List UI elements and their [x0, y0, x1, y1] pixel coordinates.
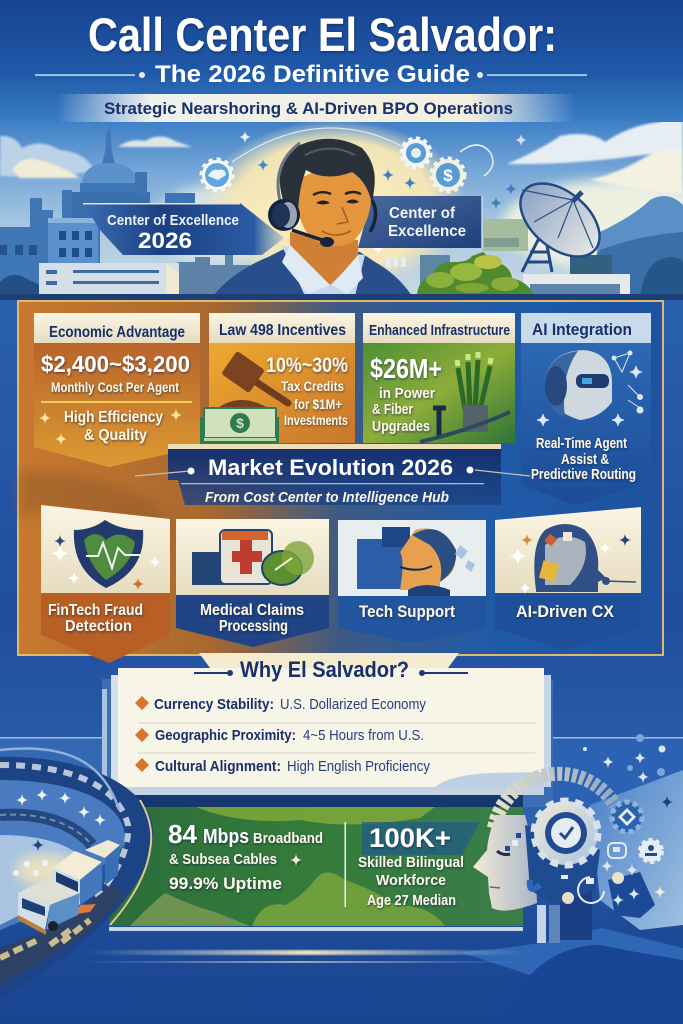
card: Law 498 Incentives: Tax Credits	[281, 378, 344, 394]
stat: workforce: Workforce	[376, 872, 446, 889]
shoulder	[460, 928, 683, 1000]
card: Law 498 Incentives	[200, 313, 355, 445]
icon: medical folder	[192, 530, 314, 585]
card: Economic Advantage	[34, 313, 200, 467]
gear icon: dollar: $	[443, 166, 453, 185]
stat: workforce: 100K+	[369, 823, 451, 853]
inner bridge	[0, 815, 92, 845]
face profile	[473, 815, 537, 911]
banner: Center of Excellence 2026	[83, 203, 284, 255]
side panels behind lower section	[0, 737, 683, 808]
eyes	[316, 200, 359, 204]
bullet: geographic proximity	[135, 727, 424, 744]
outer road shell	[0, 757, 153, 998]
box: Center of Excellence: Excellence	[388, 223, 466, 240]
card: Economic Advantage: High Efficiency	[64, 409, 163, 426]
card: Economic Advantage: Economic Advantage	[49, 324, 185, 341]
train cars	[18, 840, 120, 935]
illustration: AI head and gears	[460, 734, 683, 1024]
city buildings	[0, 190, 250, 297]
card: AI Integration: Real-Time Agent	[536, 436, 627, 452]
small gear: diamond	[612, 802, 642, 832]
card: Medical Claims Processing: Processing	[219, 618, 288, 635]
title: Call Center El Salvador:	[88, 8, 557, 61]
card: Enhanced Infrastructure: Enhanced Infrastructure	[369, 322, 510, 339]
stat: broadband	[168, 819, 323, 893]
satellite dish	[519, 182, 601, 273]
card: AI Integration: Assist &	[561, 452, 609, 468]
headset band	[278, 143, 300, 205]
fan ring	[494, 774, 615, 828]
icon: AI head profile	[509, 524, 636, 594]
swirl arrow	[460, 145, 493, 176]
suit	[213, 246, 412, 296]
glowing base line	[80, 950, 527, 963]
microphone	[292, 230, 322, 240]
stat: workforce: Age 27 Median	[367, 892, 456, 909]
heading tab: Why El Salvador?	[240, 657, 409, 682]
card: Law 498 Incentives: Investments	[284, 412, 348, 428]
card: Enhanced Infrastructure	[363, 313, 515, 443]
icon: support agent at computer	[357, 527, 475, 596]
small gear: person	[640, 840, 662, 862]
headset left cup	[268, 199, 300, 231]
subtitle: The 2026 Definitive Guide	[155, 61, 470, 88]
bullet: currency stability: Currency Stability:	[154, 696, 274, 713]
illustrated skyline scene	[0, 113, 683, 297]
card: FinTech Fraud Detection: FinTech Fraud	[48, 602, 143, 619]
icon: money stack: $	[236, 415, 244, 431]
stat: broadband: & Subsea Cables	[169, 851, 277, 868]
icon: network	[537, 351, 643, 426]
stat: broadband: Broadband	[253, 830, 323, 847]
tagline ribbon: Strategic Nearshoring & AI-Driven BPO Operations	[104, 99, 513, 118]
banner: Center of Excellence 2026: 2026	[138, 228, 192, 253]
card: Enhanced Infrastructure: in Power	[379, 385, 435, 402]
heading tab	[194, 653, 468, 682]
banner: Center of Excellence 2026: Center of Excellence	[107, 212, 239, 229]
satellite base building	[523, 274, 630, 296]
right mountains	[596, 196, 683, 255]
far right trees	[640, 257, 683, 297]
neck	[290, 232, 358, 285]
panel: Why El Salvador?	[118, 653, 544, 787]
card: AI-Driven CX: AI-Driven CX	[516, 602, 615, 621]
bullet: currency stability	[135, 696, 426, 713]
subtitle	[35, 61, 587, 88]
left clouds	[0, 136, 192, 178]
tagline ribbon	[57, 94, 575, 122]
inner sky	[0, 775, 130, 930]
stat: broadband: 99.9% Uptime	[169, 874, 282, 893]
icon: fiber bundle	[420, 352, 510, 442]
card: FinTech Fraud Detection	[41, 505, 170, 663]
chat icon and dots	[561, 843, 626, 904]
icon: gavel	[218, 351, 288, 408]
head circuit pixels	[525, 825, 600, 905]
panel: main strategic panel	[0, 294, 683, 655]
bullet: cultural alignment: Cultural Alignment:	[155, 758, 281, 775]
card: Tech Support	[338, 520, 486, 643]
lower panel backing	[102, 675, 553, 807]
card: Enhanced Infrastructure: $26M+	[370, 353, 442, 384]
box: Center of Excellence	[358, 196, 482, 248]
heading band: Market Evolution 2026: From Cost Center to Intelligence Hub	[205, 489, 449, 506]
stat: broadband: 84	[168, 819, 198, 849]
gear icon: chat	[202, 160, 232, 190]
dark gear silhouette	[608, 872, 655, 918]
card: AI-Driven CX	[495, 507, 641, 650]
card: Enhanced Infrastructure: & Fiber	[372, 401, 413, 418]
icon: shield with heartbeat	[51, 520, 161, 590]
card: AI Integration: AI Integration	[532, 320, 632, 339]
bullet: cultural alignment	[135, 758, 430, 775]
sparkles around agent	[239, 131, 527, 255]
card: AI Integration	[521, 313, 651, 505]
bullet: cultural alignment: High English Proficiency	[287, 758, 430, 775]
collars	[282, 245, 363, 294]
stat: broadband: Mbps	[203, 826, 249, 848]
gear icon: dollar	[432, 159, 464, 191]
call center agent	[213, 139, 412, 296]
capitol dome	[72, 130, 195, 220]
bullet: geographic proximity: 4~5 Hours from U.S.	[303, 727, 424, 744]
icon: robot head	[545, 350, 612, 420]
card: FinTech Fraud Detection: Detection	[65, 618, 132, 635]
shirt	[282, 246, 365, 296]
card: Law 498 Incentives: 10%~30%	[266, 354, 348, 377]
roadway	[0, 885, 125, 985]
illustration: highway and train	[0, 748, 153, 998]
green bush	[417, 252, 534, 295]
card: Medical Claims Processing	[176, 519, 329, 647]
card: Economic Advantage: Monthly Cost Per Agent	[51, 379, 179, 395]
bullet: geographic proximity: Geographic Proximity:	[155, 727, 296, 744]
hair	[280, 139, 375, 218]
icon: money stack	[200, 408, 279, 445]
heading band: Market Evolution 2026: Market Evolution 2026	[208, 455, 453, 480]
main gear	[534, 801, 598, 865]
right clouds	[507, 122, 683, 195]
neck stripes	[537, 905, 546, 943]
card: Law 498 Incentives: Law 498 Incentives	[219, 322, 346, 339]
card: Economic Advantage: $2,400~$3,200	[41, 351, 190, 377]
gear icon: settings	[402, 139, 430, 167]
nose and mouth	[322, 207, 351, 235]
small white office icons	[386, 257, 406, 267]
card: AI Integration: Predictive Routing	[531, 467, 636, 483]
bullet: currency stability: U.S. Dollarized Economy	[280, 696, 426, 713]
face	[297, 166, 372, 246]
headset right cup	[370, 200, 376, 232]
right background buildings	[483, 219, 528, 251]
panel: connectivity and workforce	[109, 807, 523, 931]
box: Center of Excellence: Center of	[389, 205, 456, 222]
card: Law 498 Incentives: for $1M+	[294, 396, 342, 412]
card: Medical Claims Processing: Medical Claims	[200, 602, 304, 619]
heading band: Market Evolution 2026	[135, 444, 530, 506]
stat: workforce	[358, 822, 480, 909]
card: Economic Advantage: & Quality	[84, 427, 147, 444]
stat: workforce: Skilled Bilingual	[358, 854, 464, 871]
card: Enhanced Infrastructure: Upgrades	[372, 418, 430, 435]
card: Tech Support: Tech Support	[359, 602, 455, 621]
